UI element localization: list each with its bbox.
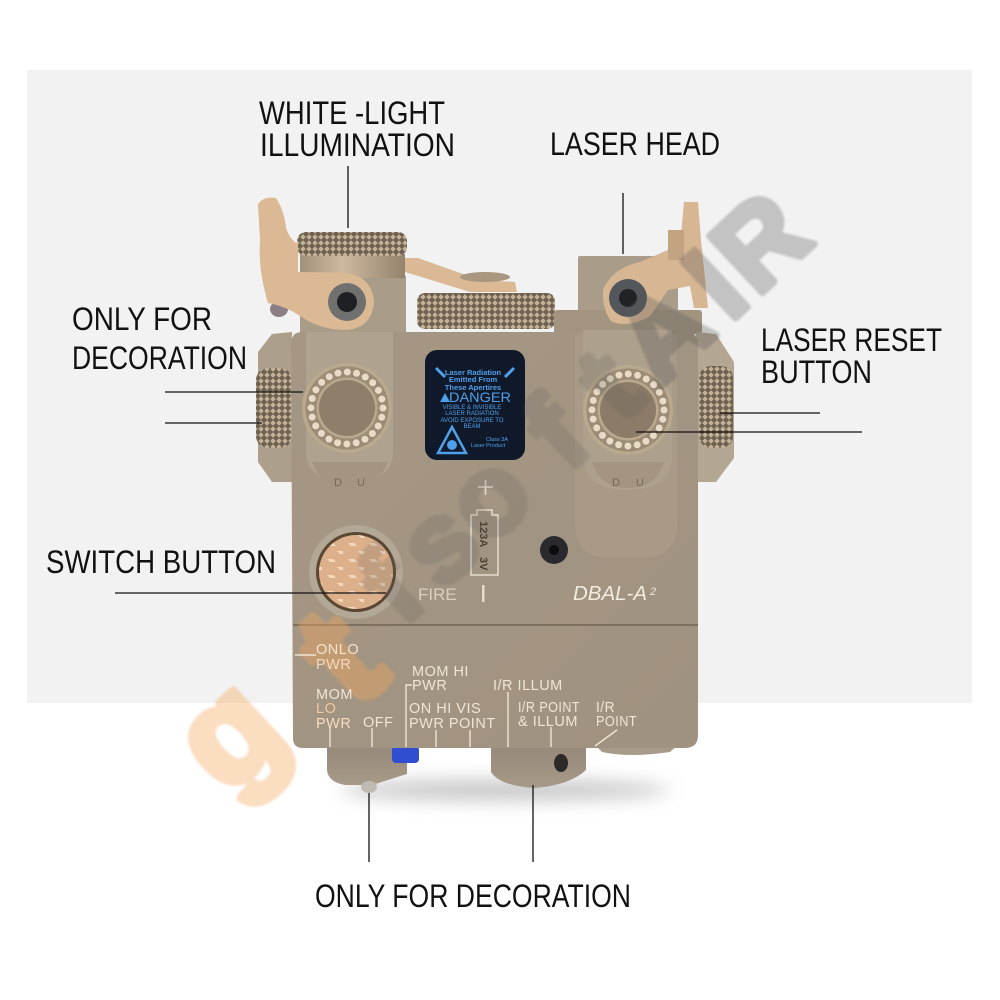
hex bolt <box>540 536 568 564</box>
watermark orange letters: g <box>141 646 311 819</box>
mode selector labels: POINT <box>596 714 637 730</box>
watermark grey body letters <box>334 325 665 646</box>
mode selector labels: PWR POINT <box>409 716 496 732</box>
left dial <box>302 363 392 453</box>
fire button <box>309 525 403 619</box>
mode selector labels <box>316 642 637 732</box>
callout: white-light illumination: WHITE -LIGHT <box>259 95 445 131</box>
watermark orange letters <box>141 566 414 838</box>
callout: white-light illumination <box>259 95 455 228</box>
device: DBAL-A2 laser unit <box>256 198 734 800</box>
battery markings: 123A <box>477 521 489 547</box>
callout: only for decoration, left <box>72 301 303 423</box>
mode selector labels: & ILLUM <box>518 714 578 730</box>
mode selector labels: I/R ILLUM <box>493 678 563 694</box>
laser warning label: Laser Product <box>471 443 506 449</box>
watermark grey body letters: t <box>552 325 665 442</box>
mode selector labels: MOM <box>316 687 353 703</box>
watermark grey letters AIR: R <box>688 169 833 315</box>
callout: laser reset button <box>636 322 942 432</box>
watermark grey body letters: f <box>334 528 447 646</box>
callout: only for decoration, bottom <box>315 785 631 914</box>
laser warning label: Laser Radiation <box>445 368 502 377</box>
right dial plate <box>575 330 677 558</box>
left knob post <box>297 232 407 334</box>
superscript: 2 <box>649 586 656 598</box>
right side wing <box>696 332 734 482</box>
mode selector labels: I/R POINT <box>518 700 580 716</box>
watermark grey letters AIR: I <box>661 228 769 341</box>
bottom nubs <box>327 745 678 793</box>
laser warning label: Class 3A <box>486 437 508 443</box>
callout: laser head: LASER HEAD <box>550 126 720 162</box>
watermark orange letters: t <box>263 577 414 734</box>
middle knurled knob <box>417 293 555 329</box>
laser warning label: Emitted From <box>449 375 497 384</box>
mode selector labels: ONLO <box>316 642 359 658</box>
callout: only for decoration, left: DECORATION <box>72 340 247 376</box>
watermark grey body letters: f <box>499 374 612 491</box>
left dial plate: U <box>357 477 365 489</box>
callout: only for decoration, bottom: ONLY FOR DECORATION <box>315 878 631 914</box>
mode selector labels: PWR <box>316 716 351 732</box>
watermark grey body letters: s <box>372 476 503 610</box>
right dial <box>583 365 673 455</box>
watermark grey letters AIR <box>591 169 833 406</box>
callout: switch button: SWITCH BUTTON <box>46 544 276 580</box>
callout: laser reset button: BUTTON <box>761 354 872 390</box>
watermark grey letters AIR: A <box>591 259 735 406</box>
laser warning label: LASER RADIATION <box>445 411 499 417</box>
FIRE text: FIRE <box>418 585 457 604</box>
selector tick lines <box>295 655 617 747</box>
mode selector labels: MOM HI <box>412 664 469 680</box>
mode selector labels: PWR <box>412 678 447 694</box>
laser warning label: These Apertires <box>445 383 501 392</box>
laser head <box>554 256 702 334</box>
right dial plate: U <box>636 477 644 489</box>
seam <box>293 624 698 626</box>
left dial plate: D <box>334 477 342 489</box>
laser warning label: AVOID EXPOSURE TO <box>440 418 504 424</box>
callout: white-light illumination: ILLUMINATION <box>260 127 455 163</box>
left side wing <box>256 332 292 482</box>
callout: laser reset button: LASER RESET <box>761 322 942 358</box>
drop shadow <box>340 780 670 800</box>
mode selector labels: LO <box>316 701 336 717</box>
mode selector labels: PWR <box>316 657 351 673</box>
laser warning label: VISIBLE & INVISIBLE <box>443 405 501 411</box>
watermark grey body letters: o <box>420 427 555 565</box>
model name: DBAL-A <box>573 583 647 605</box>
left dial plate <box>306 332 393 489</box>
mode selector labels: ON HI VIS <box>409 701 481 717</box>
mode selector labels: OFF <box>363 715 394 731</box>
laser warning label: DANGER <box>449 389 511 405</box>
watermark <box>141 153 857 838</box>
laser warning label: BEAM <box>463 424 481 430</box>
right dial plate: D <box>612 477 620 489</box>
main body <box>291 332 698 748</box>
mode selector labels: I/R <box>596 700 615 716</box>
left lever <box>258 198 517 330</box>
battery markings: 3V <box>477 557 489 571</box>
callout: only for decoration, left: ONLY FOR <box>72 301 212 337</box>
right lever <box>603 202 708 324</box>
background panel <box>27 70 972 703</box>
laser warning label <box>425 350 525 460</box>
battery markings <box>471 480 498 602</box>
